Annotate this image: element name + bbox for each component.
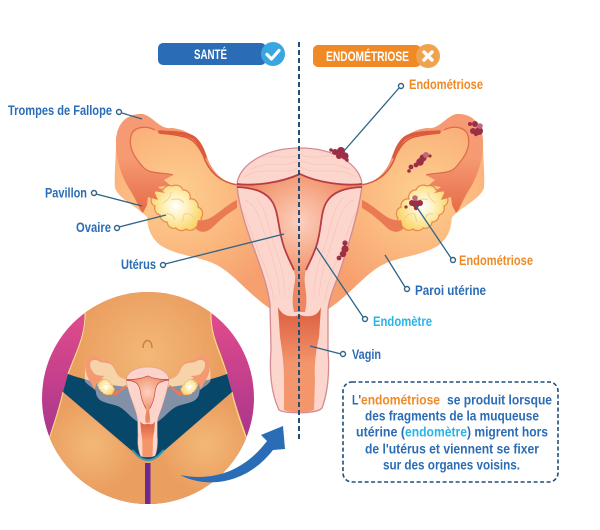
belly (45, 285, 250, 510)
label: paroi utérine: Paroi utérine (415, 283, 486, 298)
mini ligament over underwear (84, 379, 210, 422)
label: paroi utérine (385, 255, 486, 298)
pelvic illustration (115, 114, 484, 413)
label: vagin (310, 346, 381, 362)
callout: definition: de l'utérus et viennent se fixer (365, 442, 540, 456)
label: endométriose ovaire: Endométriose (459, 253, 533, 268)
callout: definition: endométriose (361, 392, 440, 408)
callout: definition: ) migrent hors (467, 424, 548, 440)
circular body inset (40, 285, 256, 510)
label: utérus: Utérus (121, 257, 156, 272)
uterus and vagina (237, 148, 362, 413)
center seam (145, 463, 150, 508)
right ovary (396, 185, 448, 231)
label: endomètre (316, 247, 432, 329)
right fallopian tube (361, 114, 483, 232)
thighs (50, 394, 246, 504)
navel (143, 340, 152, 348)
callout: definition: L' (352, 392, 361, 408)
label: utérus (121, 234, 284, 272)
label: ovaire (76, 215, 166, 235)
label: vagin: Vagin (352, 347, 381, 362)
badge: endométriose: ENDOMÉTRIOSE (326, 49, 409, 64)
label: pavillon: Pavillon (45, 186, 87, 200)
left broad ligament (115, 114, 300, 310)
label: pavillon (45, 186, 142, 206)
mini organs (85, 355, 210, 422)
center dashed divider (298, 42, 300, 441)
callout: definition: endomètre (405, 424, 467, 440)
callout: definition: des fragments de la muqueuse (365, 408, 539, 424)
inset background (40, 290, 256, 506)
arrow (180, 426, 285, 482)
underwear (63, 374, 232, 460)
badge: santé: SANTÉ (194, 47, 227, 62)
label: trompes de fallope: Trompes de Fallope (8, 103, 112, 118)
right broad ligament (299, 114, 484, 310)
label: endométriose haut: Endométriose (409, 77, 483, 92)
label: endomètre: Endomètre (373, 314, 432, 329)
callout: definition: se produit lorsque (447, 392, 552, 408)
left ovary (151, 185, 203, 231)
badge: santé (158, 42, 285, 66)
callout: definition (343, 382, 558, 482)
body contour lines (49, 312, 247, 440)
label: endométriose haut (344, 77, 483, 151)
left fallopian tube (116, 114, 238, 232)
badge: endométriose (313, 44, 440, 68)
callout: definition: sur des organes voisins. (383, 458, 520, 472)
mini uterus and ovaries (85, 355, 210, 457)
crotch highlight (132, 450, 164, 460)
label: ovaire: Ovaire (76, 220, 111, 235)
lesions: endometriosis (329, 121, 483, 260)
label: endométriose ovaire (416, 206, 533, 268)
callout: definition: utérine ( (356, 424, 405, 440)
